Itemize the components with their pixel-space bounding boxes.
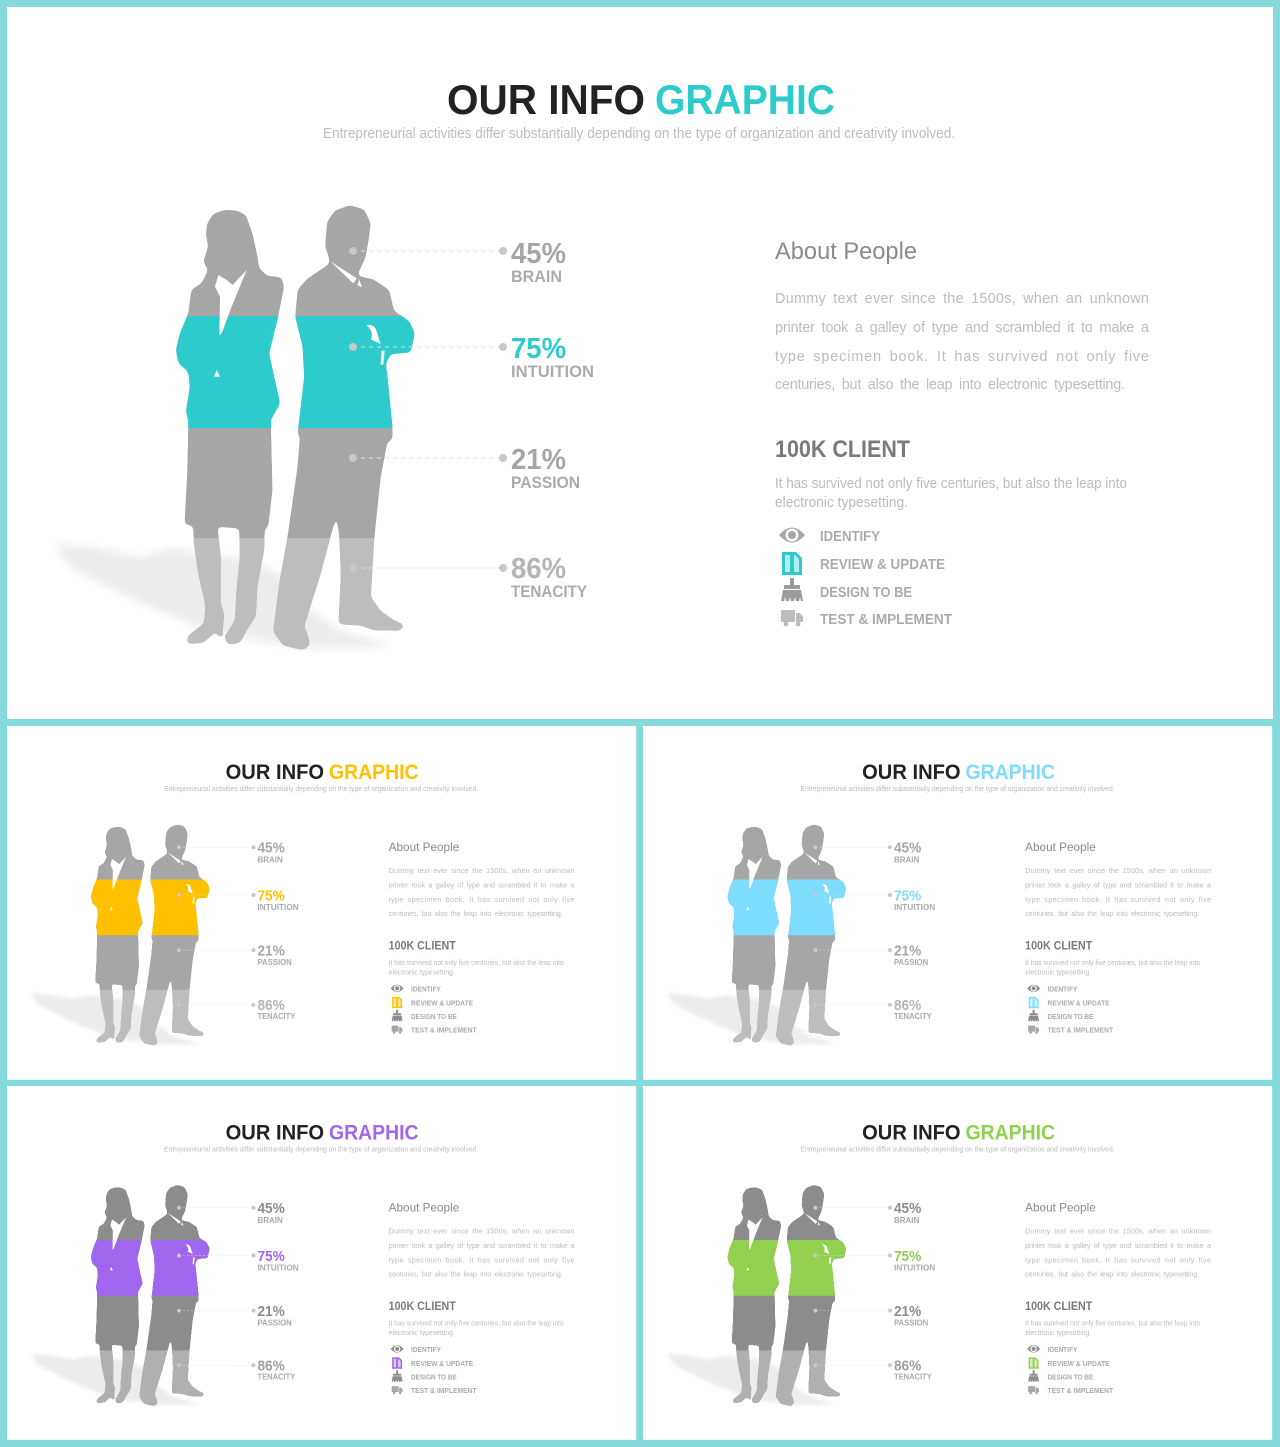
stat: brain: BRAIN: [511, 267, 562, 286]
green about text: About People: [1025, 1201, 1096, 1215]
purple client text: [389, 1299, 564, 1337]
silhouettes of woman and man: [55, 205, 415, 650]
green about text: type specimen book. It has survived not only five: [1025, 1255, 1211, 1264]
blue client text: It has survived not only five centuries, but also the leap into: [1025, 958, 1200, 967]
blue stats: TENACITY: [894, 1011, 932, 1021]
yellow about text: Dummy text ever since the 1500s, when an unknown: [389, 866, 575, 875]
green icon list: DESIGN TO BE: [1048, 1373, 1093, 1382]
yellow stats: 21%: [257, 944, 285, 960]
blue stats: 21%: [894, 944, 921, 960]
yellow stats: TENACITY: [257, 1011, 296, 1021]
green stats: 75%: [894, 1249, 921, 1265]
purple title: [226, 1122, 418, 1145]
stat: passion: [511, 444, 580, 492]
paragraph: printer took a galley of type and scrambled it to make a: [775, 320, 1150, 336]
icon list: DESIGN TO BE: [820, 584, 912, 601]
blue connectors: [813, 845, 892, 1007]
blue title: [862, 761, 1055, 784]
blue about text: About People: [1025, 840, 1096, 854]
icon list: REVIEW & UPDATE: [820, 556, 945, 573]
stat: intuition: INTUITION: [511, 362, 594, 381]
blue icon list: [1027, 984, 1114, 1035]
yellow client text: [389, 939, 564, 976]
purple icon list: REVIEW & UPDATE: [411, 1359, 473, 1368]
yellow connectors: [177, 845, 255, 1007]
yellow title: GRAPHIC: [329, 761, 418, 784]
yellow icon list: IDENTIFY: [411, 984, 441, 993]
green title: [862, 1122, 1055, 1145]
stat: passion: PASSION: [511, 473, 580, 492]
blue title: OUR INFO: [862, 761, 961, 784]
icon list: TEST & IMPLEMENT: [820, 611, 952, 628]
green connectors: [813, 1206, 892, 1367]
yellow client text: 100K CLIENT: [389, 939, 456, 953]
yellow subtitle: Entrepreneurial activities differ substantially depending on the type of organization and creativity involved.: [164, 784, 478, 793]
stat: intuition: [511, 333, 594, 381]
blue client text: 100K CLIENT: [1025, 939, 1093, 953]
green stats: [894, 1201, 935, 1382]
blue stats: BRAIN: [894, 855, 919, 865]
panel: purple slide: [7, 1086, 636, 1440]
purple title: GRAPHIC: [329, 1122, 418, 1145]
stat connectors: [349, 247, 507, 572]
green client text: 100K CLIENT: [1025, 1299, 1093, 1313]
yellow icon list: [391, 984, 477, 1035]
purple about text: About People: [389, 1201, 460, 1215]
yellow stats: 45%: [257, 841, 285, 857]
purple stats: 21%: [257, 1304, 285, 1320]
yellow title: OUR INFO: [226, 761, 324, 784]
stat: tenacity: TENACITY: [511, 582, 588, 601]
stat: brain: [511, 238, 566, 286]
purple stats: [257, 1201, 299, 1382]
green about text: centuries, but also the leap into electronic typesetting.: [1025, 1269, 1199, 1278]
stat: tenacity: 86%: [511, 553, 566, 585]
green client text: It has survived not only five centuries, but also the leap into: [1025, 1319, 1200, 1328]
green title: OUR INFO: [862, 1122, 961, 1145]
blue title: GRAPHIC: [966, 761, 1055, 784]
blue stats: 45%: [894, 841, 921, 857]
green stats: INTUITION: [894, 1262, 935, 1272]
blue icon list: REVIEW & UPDATE: [1048, 998, 1110, 1007]
blue about text: [1025, 840, 1211, 918]
panel: yellow slide: [7, 726, 636, 1080]
client text: [775, 476, 1127, 511]
purple icon list: TEST & IMPLEMENT: [411, 1386, 477, 1395]
blue about text: printer took a galley of type and scrambled it to make a: [1025, 881, 1211, 890]
icon list: IDENTIFY: [820, 528, 880, 545]
client text: It has survived not only five centuries, but also the leap into: [775, 476, 1127, 492]
green stats: BRAIN: [894, 1215, 919, 1225]
purple client text: It has survived not only five centuries, but also the leap into: [389, 1319, 564, 1328]
blue icon list: TEST & IMPLEMENT: [1048, 1026, 1114, 1035]
yellow title: [226, 761, 418, 784]
yellow stats: 75%: [257, 888, 285, 904]
paragraph: centuries, but also the leap into electronic typesetting.: [775, 377, 1125, 393]
title: [447, 76, 835, 123]
blue stats: 86%: [894, 998, 921, 1014]
green client text: electronic typesetting.: [1025, 1328, 1091, 1337]
panel: green slide: [643, 1086, 1272, 1440]
yellow stats: [257, 841, 299, 1021]
yellow stats: 86%: [257, 998, 285, 1014]
yellow stats: PASSION: [257, 957, 292, 967]
icon list: [779, 528, 952, 628]
green stats: 21%: [894, 1304, 921, 1320]
blue icon list: DESIGN TO BE: [1048, 1012, 1093, 1021]
purple about text: printer took a galley of type and scrambled it to make a: [389, 1241, 575, 1250]
title: GRAPHIC: [655, 76, 835, 123]
yellow icon list: TEST & IMPLEMENT: [411, 1026, 477, 1035]
stat: tenacity: [511, 553, 588, 601]
blue stats: PASSION: [894, 957, 928, 967]
green icon list: REVIEW & UPDATE: [1048, 1359, 1110, 1368]
heading: 100k client: 100K CLIENT: [775, 436, 910, 463]
green stats: 86%: [894, 1358, 921, 1374]
green about text: [1025, 1201, 1211, 1278]
blue client text: electronic typesetting.: [1025, 967, 1091, 976]
purple about text: centuries, but also the leap into electronic typesetting.: [389, 1269, 563, 1278]
yellow stats: INTUITION: [257, 902, 299, 912]
purple subtitle: Entrepreneurial activities differ substantially depending on the type of organization and creativity involved.: [164, 1145, 478, 1154]
yellow icon list: DESIGN TO BE: [411, 1012, 457, 1021]
purple stats: INTUITION: [257, 1262, 299, 1272]
stat: intuition: 75%: [511, 333, 566, 365]
purple icon list: IDENTIFY: [411, 1345, 441, 1354]
green icon list: [1027, 1345, 1114, 1395]
subtitle: Entrepreneurial activities differ substantially depending on the type of organization and creativity involved.: [323, 126, 955, 142]
stat: passion: 21%: [511, 444, 566, 476]
purple client text: electronic typesetting.: [389, 1328, 455, 1337]
purple connectors: [177, 1206, 255, 1367]
green silhouettes: [667, 1185, 846, 1406]
paragraph: type specimen book. It has survived not only five: [775, 349, 1149, 365]
green stats: 45%: [894, 1201, 921, 1217]
green subtitle: Entrepreneurial activities differ substantially depending on the type of organization and creativity involved.: [801, 1145, 1115, 1154]
heading: about people: About People: [775, 238, 917, 265]
purple icon list: DESIGN TO BE: [411, 1373, 457, 1382]
blue silhouettes: [667, 825, 846, 1046]
yellow about text: About People: [389, 840, 460, 854]
purple stats: 45%: [257, 1201, 285, 1217]
blue stats: INTUITION: [894, 902, 935, 912]
green about text: Dummy text ever since the 1500s, when an unknown: [1025, 1227, 1211, 1236]
green title: GRAPHIC: [966, 1122, 1055, 1145]
purple stats: TENACITY: [257, 1372, 296, 1382]
green icon list: TEST & IMPLEMENT: [1048, 1386, 1114, 1395]
green stats: PASSION: [894, 1318, 928, 1328]
purple title: OUR INFO: [226, 1122, 324, 1145]
title: OUR INFO: [447, 76, 645, 123]
purple stats: PASSION: [257, 1318, 292, 1328]
purple stats: 86%: [257, 1358, 285, 1374]
yellow about text: centuries, but also the leap into electronic typesetting.: [389, 909, 563, 918]
purple stats: 75%: [257, 1249, 285, 1265]
green about text: printer took a galley of type and scrambled it to make a: [1025, 1241, 1211, 1250]
purple client text: 100K CLIENT: [389, 1299, 456, 1313]
blue client text: [1025, 939, 1200, 976]
paragraph: Dummy text ever since the 1500s, when an unknown: [775, 291, 1149, 307]
blue about text: centuries, but also the leap into electronic typesetting.: [1025, 909, 1199, 918]
blue about text: type specimen book. It has survived not only five: [1025, 895, 1211, 904]
yellow client text: It has survived not only five centuries, but also the leap into: [389, 958, 564, 967]
purple about text: Dummy text ever since the 1500s, when an unknown: [389, 1227, 575, 1236]
blue stats: 75%: [894, 888, 921, 904]
purple about text: type specimen book. It has survived not only five: [389, 1255, 575, 1264]
panel: main teal slide: [7, 7, 1273, 719]
client text: electronic typesetting.: [775, 495, 908, 511]
purple about text: [389, 1201, 575, 1278]
yellow stats: BRAIN: [257, 855, 283, 865]
purple silhouettes: [31, 1185, 210, 1406]
green icon list: IDENTIFY: [1048, 1345, 1077, 1354]
green client text: [1025, 1299, 1200, 1337]
stat: brain: 45%: [511, 238, 566, 270]
yellow silhouettes: [31, 825, 210, 1046]
blue about text: Dummy text ever since the 1500s, when an unknown: [1025, 866, 1211, 875]
purple stats: BRAIN: [257, 1215, 283, 1225]
blue stats: [894, 841, 935, 1021]
panel: sky blue slide: [643, 726, 1272, 1080]
purple icon list: [391, 1345, 477, 1395]
yellow about text: printer took a galley of type and scrambled it to make a: [389, 881, 575, 890]
paragraph: [775, 291, 1150, 393]
blue subtitle: Entrepreneurial activities differ substantially depending on the type of organization and creativity involved.: [801, 784, 1115, 793]
yellow about text: [389, 840, 575, 918]
blue icon list: IDENTIFY: [1048, 984, 1077, 993]
yellow about text: type specimen book. It has survived not only five: [389, 895, 575, 904]
green stats: TENACITY: [894, 1372, 932, 1382]
yellow client text: electronic typesetting.: [389, 967, 455, 976]
yellow icon list: REVIEW & UPDATE: [411, 998, 473, 1007]
